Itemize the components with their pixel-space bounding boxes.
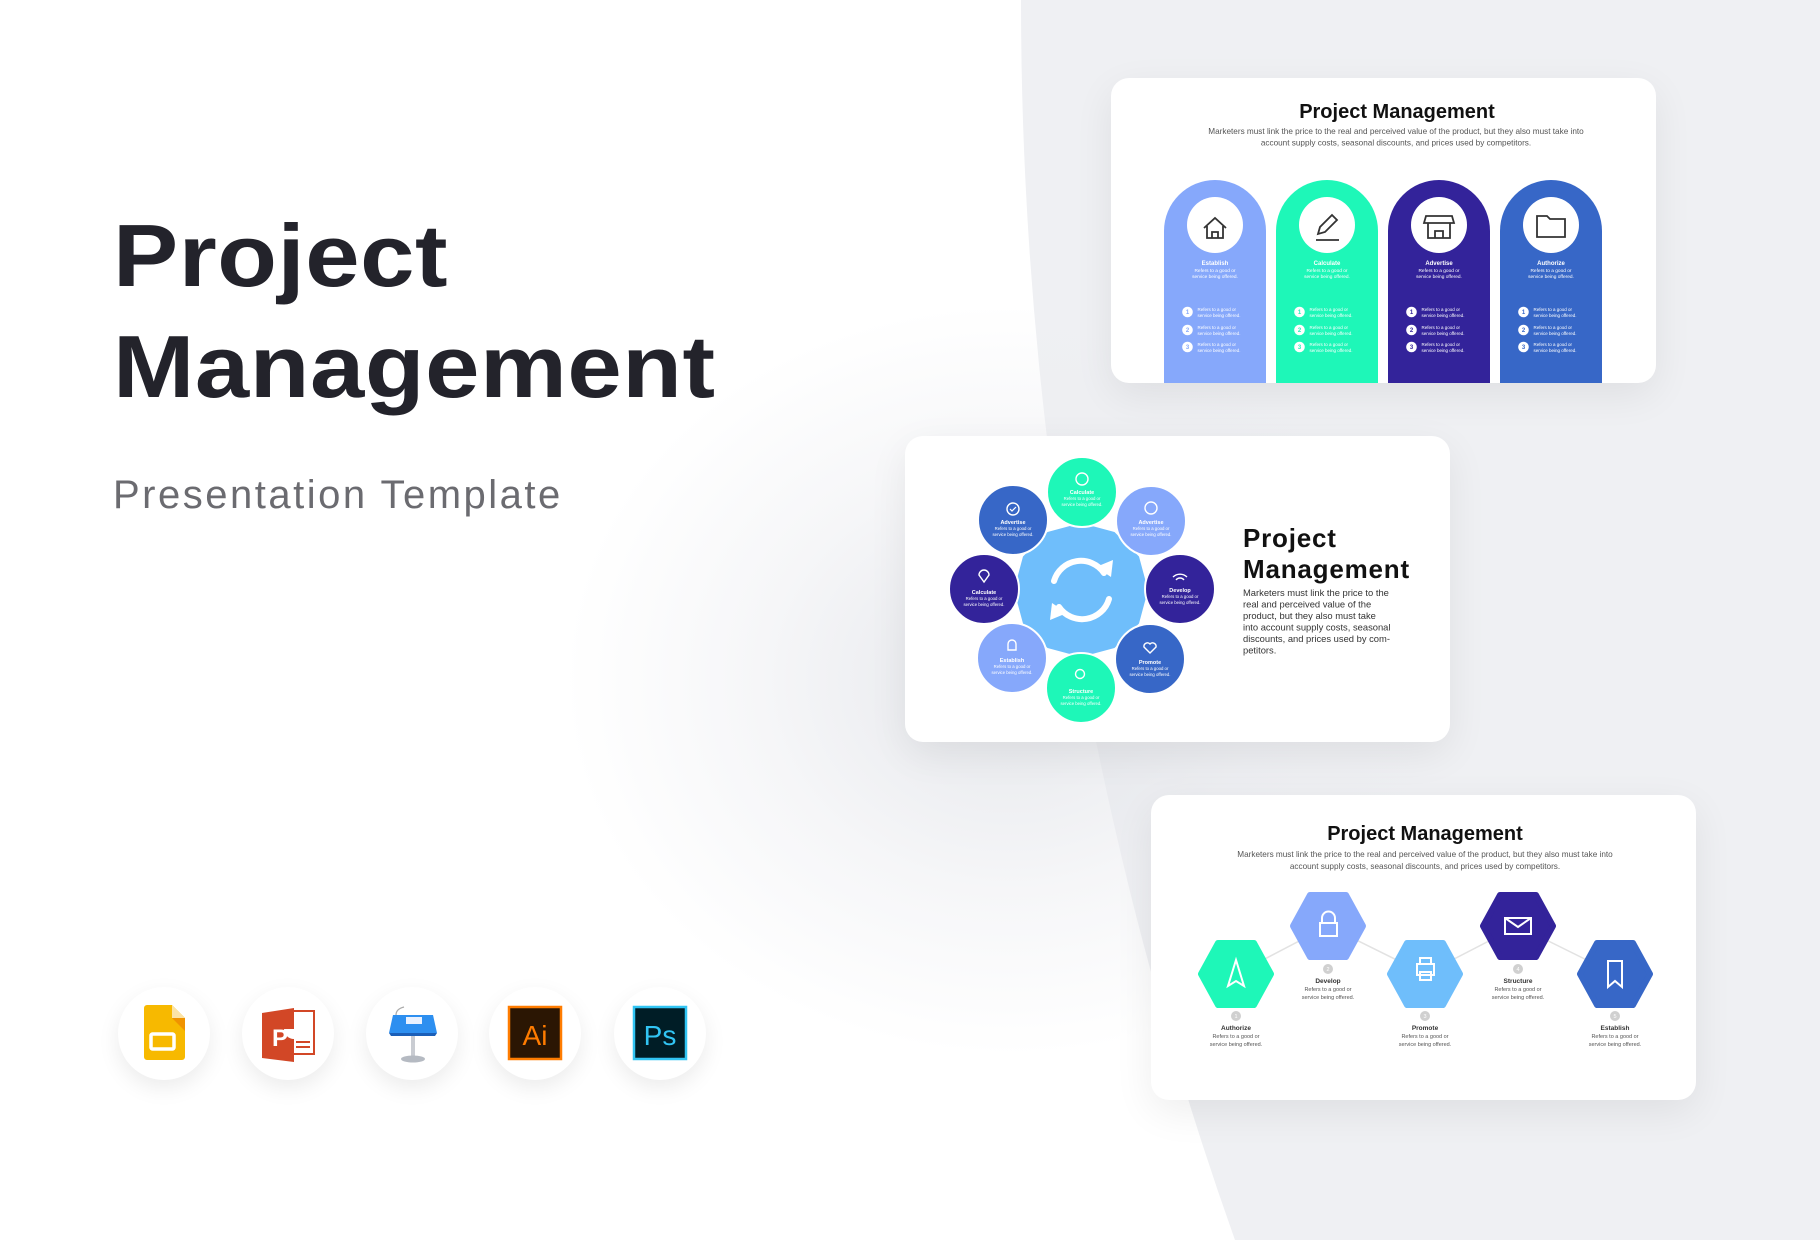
satellite: Advertise top-right: service being offered. <box>1130 532 1172 537</box>
satellite: Advertise top-right: Advertise <box>1138 520 1164 526</box>
slide description: discounts, and prices used by com- <box>1243 633 1390 644</box>
icon: google slides <box>118 987 210 1080</box>
icon: powerpoint: P <box>272 1025 288 1052</box>
satellite: Develop right: Develop <box>1169 588 1191 594</box>
pillar: Calculate: 1 <box>1298 310 1302 316</box>
step 5 Establish: service being offered. <box>1589 1042 1642 1048</box>
slide description: account supply costs, seasonal discounts, and prices used by competitors. <box>1290 862 1560 871</box>
satellite: Structure bottom <box>1046 653 1116 723</box>
pillar: Establish: service being offered. <box>1198 331 1240 336</box>
icon: powerpoint <box>242 987 334 1080</box>
pillar: Authorize: service being offered. <box>1534 348 1576 353</box>
subtitle: Presentation Template <box>113 473 563 517</box>
pillar: Authorize: Refers to a good or <box>1530 268 1572 274</box>
pillar: Advertise: 1 <box>1410 310 1414 316</box>
step 5 Establish: Refers to a good or <box>1591 1034 1639 1040</box>
satellite: Calculate top: Refers to a good or <box>1064 496 1101 501</box>
slide description <box>1237 850 1613 871</box>
pillar: Establish: 3 <box>1186 345 1190 351</box>
pillar: Establish: 1 <box>1186 310 1190 316</box>
pillar: Establish: Refers to a good or <box>1198 342 1237 347</box>
satellite: Calculate left: service being offered. <box>963 602 1005 607</box>
slide title: Management <box>1243 554 1410 584</box>
pillar: Authorize: 1 <box>1522 310 1526 316</box>
step 3 Promote: service being offered. <box>1399 1042 1452 1048</box>
pillar: Advertise: Advertise <box>1425 261 1453 267</box>
pillar: Establish: Refers to a good or <box>1194 268 1236 274</box>
step 3 Promote: 3 <box>1423 1014 1427 1020</box>
slide description: product, but they also must take <box>1243 610 1376 621</box>
satellite: Structure bottom: Structure <box>1069 689 1093 695</box>
satellite: Promote bottom-right: Promote <box>1139 660 1161 666</box>
icon: illustrator: Ai <box>523 1020 547 1051</box>
pillar: Establish: service being offered. <box>1192 274 1238 280</box>
step 3 Promote: Promote <box>1412 1025 1439 1032</box>
slide title: Project Management <box>1299 101 1495 123</box>
icon: photoshop <box>614 987 706 1080</box>
step 2 Develop: Develop <box>1315 978 1341 985</box>
pillar: Advertise: Refers to a good or <box>1422 307 1461 312</box>
panel: cycle slide <box>905 436 1450 742</box>
satellite: Calculate top: Calculate <box>1070 490 1094 496</box>
slide description: Marketers must link the price to the real and perceived value of the product, but they also must take into <box>1237 850 1613 859</box>
main title <box>113 206 716 416</box>
slide description <box>1208 127 1584 148</box>
step 2 Develop: Refers to a good or <box>1304 987 1352 993</box>
step 5 Establish: Establish <box>1601 1025 1629 1032</box>
satellite: Establish bottom-left <box>977 623 1047 693</box>
pillar: Calculate: Calculate <box>1314 261 1341 267</box>
pillar: Calculate: Refers to a good or <box>1306 268 1348 274</box>
pillar: Authorize: Refers to a good or <box>1534 342 1573 347</box>
step 4 Structure <box>1483 895 1553 1001</box>
pillar: Establish <box>1164 180 1266 383</box>
pillar: Calculate: service being offered. <box>1304 274 1350 280</box>
step 2 Develop <box>1293 895 1363 1001</box>
pillar: Establish: Refers to a good or <box>1198 325 1237 330</box>
satellite: Advertise top-left: Advertise <box>1000 520 1026 526</box>
icon: illustrator <box>489 987 581 1080</box>
satellite: Advertise top-left: Refers to a good or <box>995 526 1032 531</box>
step 5 Establish <box>1580 943 1650 1048</box>
pillar: Advertise: 2 <box>1410 328 1414 334</box>
satellite: Structure bottom: Refers to a good or <box>1063 695 1100 700</box>
satellite: Structure bottom: service being offered. <box>1060 701 1102 706</box>
satellite: Promote bottom-right <box>1115 624 1185 694</box>
main title: Project <box>113 206 448 305</box>
pillar: Calculate: service being offered. <box>1310 331 1352 336</box>
pillar: Authorize: Authorize <box>1537 261 1565 267</box>
pillar: Establish: service being offered. <box>1198 313 1240 318</box>
satellite: Advertise top-left: service being offered. <box>992 532 1034 537</box>
slide description: real and perceived value of the <box>1243 598 1371 610</box>
panel: pillars slide <box>1111 78 1656 383</box>
pillar: Authorize: Refers to a good or <box>1534 325 1573 330</box>
step 2 Develop: service being offered. <box>1302 995 1355 1001</box>
pillar: Calculate: Refers to a good or <box>1310 307 1349 312</box>
slide title: Project Management <box>1327 823 1523 845</box>
step 4 Structure: Refers to a good or <box>1494 987 1542 993</box>
pillar: Advertise: Refers to a good or <box>1422 342 1461 347</box>
step 4 Structure: Structure <box>1504 978 1533 985</box>
pillar: Establish: service being offered. <box>1198 348 1240 353</box>
pillar: Establish: Refers to a good or <box>1198 307 1237 312</box>
pillar: Authorize <box>1500 180 1602 383</box>
satellite: Advertise top-right: Refers to a good or <box>1133 526 1170 531</box>
icon: keynote <box>366 987 458 1080</box>
pillar: Authorize: 2 <box>1522 328 1526 334</box>
central gear blob <box>1014 523 1148 657</box>
step 2 Develop: 2 <box>1326 967 1330 973</box>
satellite: Develop right: Refers to a good or <box>1162 594 1199 599</box>
slide description: petitors. <box>1243 644 1276 656</box>
slide title: Project <box>1243 523 1337 553</box>
satellite: Establish bottom-left: Refers to a good or <box>994 664 1031 669</box>
pillar: Advertise: Refers to a good or <box>1422 325 1461 330</box>
pillar: Authorize: 3 <box>1522 345 1526 351</box>
pillar: Establish: 2 <box>1186 328 1190 334</box>
slide description: Marketers must link the price to the <box>1243 587 1389 598</box>
icon: photoshop: Ps <box>644 1020 676 1051</box>
step 1 Authorize: 1 <box>1234 1014 1238 1020</box>
pillar: Advertise: service being offered. <box>1422 313 1464 318</box>
step 1 Authorize: Refers to a good or <box>1212 1034 1260 1040</box>
pillar: Advertise: service being offered. <box>1416 274 1462 280</box>
step 3 Promote <box>1390 943 1460 1048</box>
satellite: Calculate left: Refers to a good or <box>966 596 1003 601</box>
slide description <box>1243 587 1390 656</box>
pillar: Advertise <box>1388 180 1490 383</box>
satellite: Calculate top: service being offered. <box>1061 502 1103 507</box>
pillar: Advertise: service being offered. <box>1422 331 1464 336</box>
icon: refresh arrows <box>1054 561 1109 619</box>
pillar: Advertise: 3 <box>1410 345 1414 351</box>
pillar: Calculate: service being offered. <box>1310 348 1352 353</box>
satellite: Establish bottom-left: service being offered. <box>991 670 1033 675</box>
satellite: Promote bottom-right: service being offered. <box>1129 672 1171 677</box>
pillar: Establish: Establish <box>1202 261 1229 267</box>
step 4 Structure: service being offered. <box>1492 995 1545 1001</box>
pillar: Calculate <box>1276 180 1378 383</box>
pillar: Calculate: service being offered. <box>1310 313 1352 318</box>
satellite: Promote bottom-right: Refers to a good or <box>1132 666 1169 671</box>
step 5 Establish: 5 <box>1613 1014 1617 1020</box>
pillar: Authorize: service being offered. <box>1534 331 1576 336</box>
step 3 Promote: Refers to a good or <box>1401 1034 1449 1040</box>
satellite: Calculate left <box>949 554 1019 624</box>
satellite: Calculate left: Calculate <box>972 590 996 596</box>
main title: Management <box>113 317 716 416</box>
satellite: Establish bottom-left: Establish <box>1000 658 1025 664</box>
step 4 Structure: 4 <box>1516 967 1520 973</box>
slide description: Marketers must link the price to the real and perceived value of the product, but they also must take into <box>1208 127 1584 136</box>
step 1 Authorize <box>1201 943 1271 1048</box>
satellite: Advertise top-right <box>1116 486 1186 556</box>
satellite: Develop right <box>1145 554 1215 624</box>
satellite: Calculate top <box>1047 457 1117 527</box>
pillar: Authorize: Refers to a good or <box>1534 307 1573 312</box>
pillar: Authorize: service being offered. <box>1528 274 1574 280</box>
satellite: Advertise top-left <box>978 485 1048 555</box>
slide description: into account supply costs, seasonal <box>1243 622 1390 632</box>
pillar: Calculate: Refers to a good or <box>1310 325 1349 330</box>
pillar: Advertise: service being offered. <box>1422 348 1464 353</box>
satellite: Develop right: service being offered. <box>1159 600 1201 605</box>
pillar: Calculate: 3 <box>1298 345 1302 351</box>
pillar: Advertise: Refers to a good or <box>1418 268 1460 274</box>
panel: hexagon process slide <box>1151 795 1696 1100</box>
slide description: account supply costs, seasonal discounts, and prices used by competitors. <box>1261 138 1531 148</box>
step 1 Authorize: Authorize <box>1221 1025 1251 1032</box>
connector lines <box>1236 926 1615 974</box>
step 1 Authorize: service being offered. <box>1210 1042 1263 1048</box>
pillar: Calculate: Refers to a good or <box>1310 342 1349 347</box>
pillar: Authorize: service being offered. <box>1534 313 1576 318</box>
pillar: Calculate: 2 <box>1298 328 1302 334</box>
